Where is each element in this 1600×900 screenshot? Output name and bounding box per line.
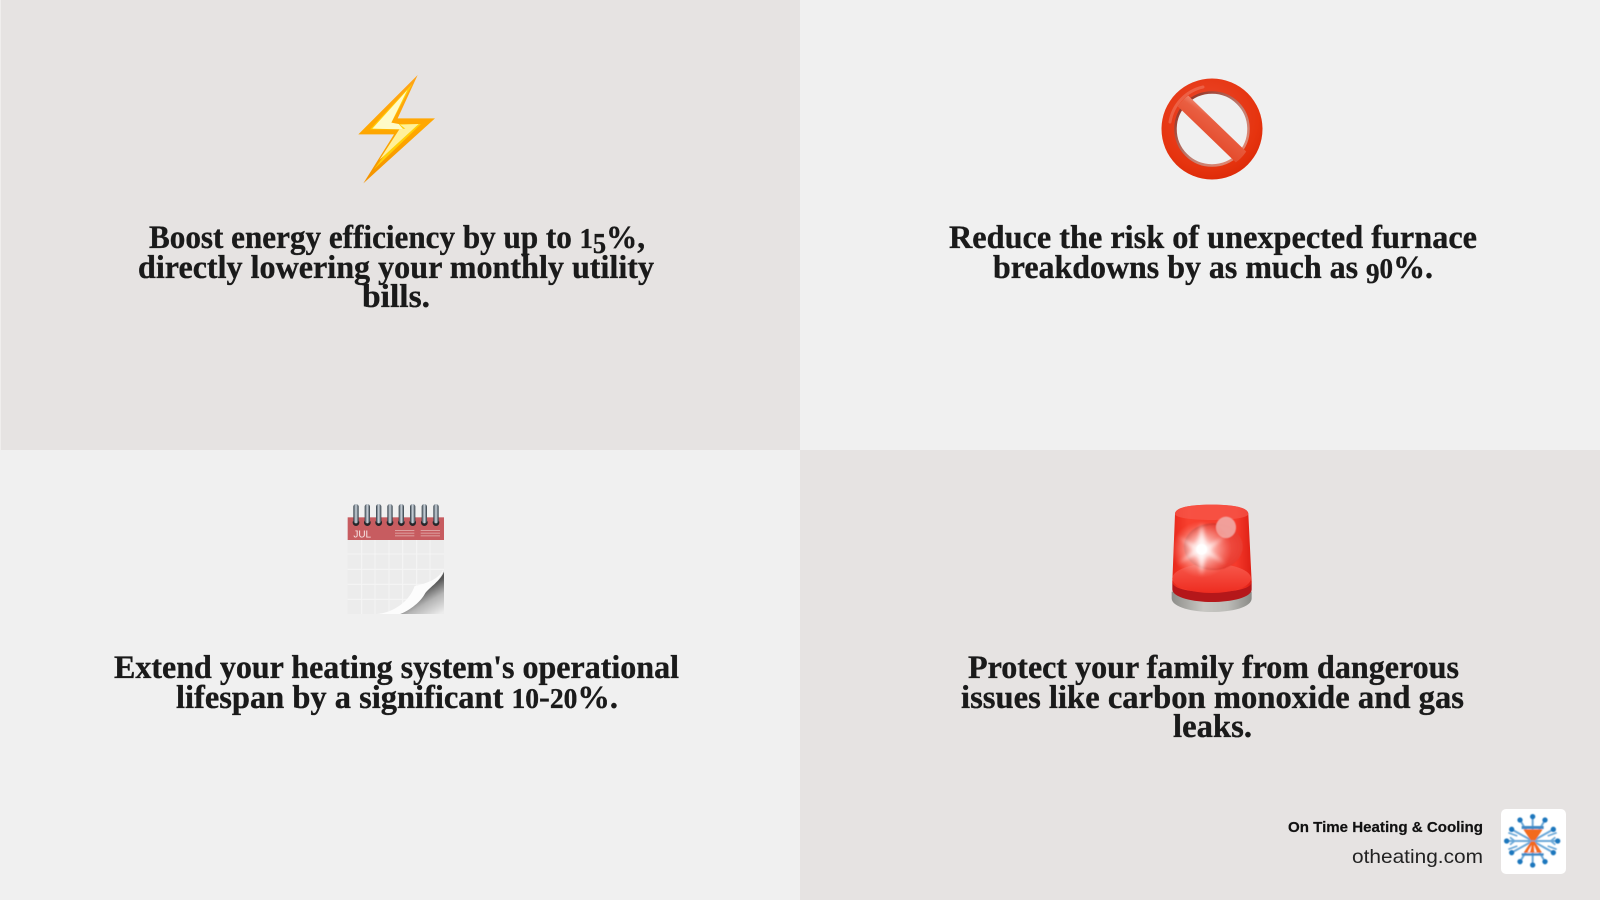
heading: extended lifespan benefit: Extend your heating system's operational <box>114 650 679 686</box>
heading: energy efficiency benefit: 5 <box>593 229 606 260</box>
heading: energy efficiency benefit: directly lowering your monthly utility <box>138 250 654 286</box>
heading: family safety benefit: Protect your family from dangerous <box>968 650 1459 686</box>
heading: extended lifespan benefit: lifespan by a significant 10-20%. <box>176 680 618 716</box>
panel: extended lifespan <box>0 450 800 900</box>
heading: reduced breakdowns benefit: 9 <box>1366 259 1380 290</box>
heading: reduced breakdowns benefit: Reduce the risk of unexpected furnace <box>949 220 1477 256</box>
heading: reduced breakdowns benefit <box>949 220 1477 290</box>
heading: energy efficiency benefit: bills. <box>362 279 430 315</box>
panel: family safety <box>800 450 1600 900</box>
panel: reduced breakdowns <box>949 78 1476 286</box>
panel: energy efficiency <box>0 0 800 450</box>
icon: prohibited sign <box>1162 78 1262 180</box>
website: otheating.com <box>1352 846 1483 868</box>
heading: energy efficiency benefit: Boost energy efficiency by up to 1 <box>149 220 597 256</box>
icon: lightning bolt <box>358 75 435 183</box>
heading: reduced breakdowns benefit: breakdowns by as much as <box>993 250 1370 286</box>
heading: reduced breakdowns benefit: 0 <box>1380 254 1393 285</box>
heading: extended lifespan benefit <box>114 650 679 716</box>
icon: rotating siren light <box>1172 505 1252 612</box>
brand block <box>1288 809 1566 874</box>
heading: family safety benefit: issues like carbon monoxide and gas <box>961 680 1464 716</box>
logo <box>1501 809 1566 874</box>
company name: On Time Heating & Cooling <box>1288 819 1483 836</box>
heading: energy efficiency benefit: %, <box>606 220 645 256</box>
heading: family safety benefit <box>961 650 1464 745</box>
heading: energy efficiency benefit <box>138 220 654 315</box>
icon: calendar <box>348 504 444 614</box>
heading: reduced breakdowns benefit: %. <box>1393 250 1434 286</box>
icon: calendar: JUL <box>353 530 372 541</box>
heading: family safety benefit: leaks. <box>1173 709 1252 745</box>
